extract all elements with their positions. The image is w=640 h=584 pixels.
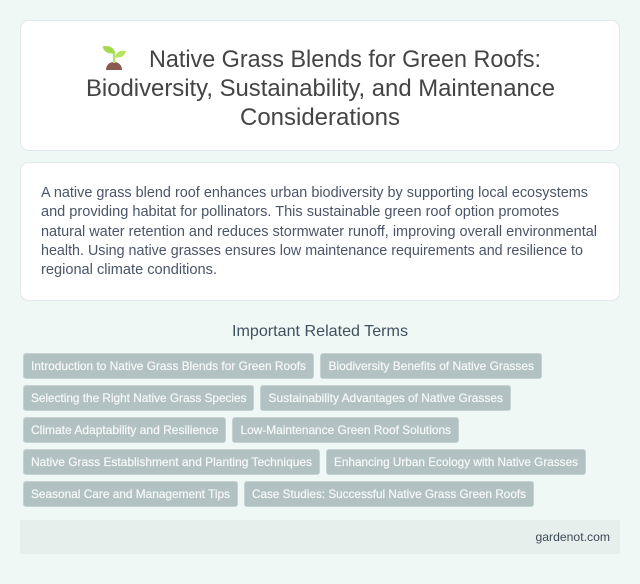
chip: climate adaptability <box>24 418 226 442</box>
description text: regional climate conditions. <box>41 261 217 278</box>
chip: climate adaptability: Climate Adaptability and Resilience <box>31 423 219 437</box>
chip: establishment and planting <box>24 450 320 474</box>
chip: biodiversity benefits <box>320 354 542 378</box>
description text: and providing habitat for pollinators. This sustainable green roof option promotes <box>41 203 559 220</box>
description text: A native grass blend roof enhances urban biodiversity by supporting local ecosystems <box>41 184 588 201</box>
chip: case studies <box>244 482 534 506</box>
chip: low-maintenance solutions <box>232 418 458 442</box>
chip: introduction <box>24 354 314 378</box>
chip: sustainability advantages <box>260 386 510 410</box>
description text <box>41 184 597 278</box>
chip: urban ecology <box>326 450 586 474</box>
chip: introduction: Introduction to Native Grass Blends for Green Roofs <box>31 359 306 373</box>
heading: important related terms: Important Related Terms <box>232 323 408 340</box>
footer source text: gardenot.com <box>536 530 610 544</box>
chip: seasonal care <box>24 482 238 506</box>
chip: selecting species <box>24 386 254 410</box>
panel: related term chips <box>24 354 586 506</box>
title <box>86 46 555 131</box>
chip: seasonal care: Seasonal Care and Management Tips <box>31 487 230 501</box>
panel: title card <box>20 20 620 150</box>
title: Considerations <box>240 104 400 131</box>
chip: establishment and planting: Native Grass Establishment and Planting Techniques <box>31 455 312 469</box>
footer <box>20 520 620 554</box>
icon: seedling <box>102 46 126 70</box>
chip: case studies: Case Studies: Successful Native Grass Green Roofs <box>252 487 526 501</box>
chip: low-maintenance solutions: Low-Maintenance Green Roof Solutions <box>240 423 451 437</box>
description text: natural water retention and reduces stormwater runoff, improving overall environmental <box>41 223 597 240</box>
title: Native Grass Blends for Green Roofs: <box>149 46 541 73</box>
chip: biodiversity benefits: Biodiversity Benefits of Native Grasses <box>328 359 534 373</box>
description text: health. Using native grasses ensures low maintenance requirements and resilience to <box>41 242 583 259</box>
chip: selecting species: Selecting the Right Native Grass Species <box>31 391 246 405</box>
chip: sustainability advantages: Sustainability Advantages of Native Grasses <box>268 391 503 405</box>
title: Biodiversity, Sustainability, and Maintenance <box>86 75 555 102</box>
panel: description <box>20 162 620 300</box>
chip: urban ecology: Enhancing Urban Ecology with Native Grasses <box>334 455 578 469</box>
